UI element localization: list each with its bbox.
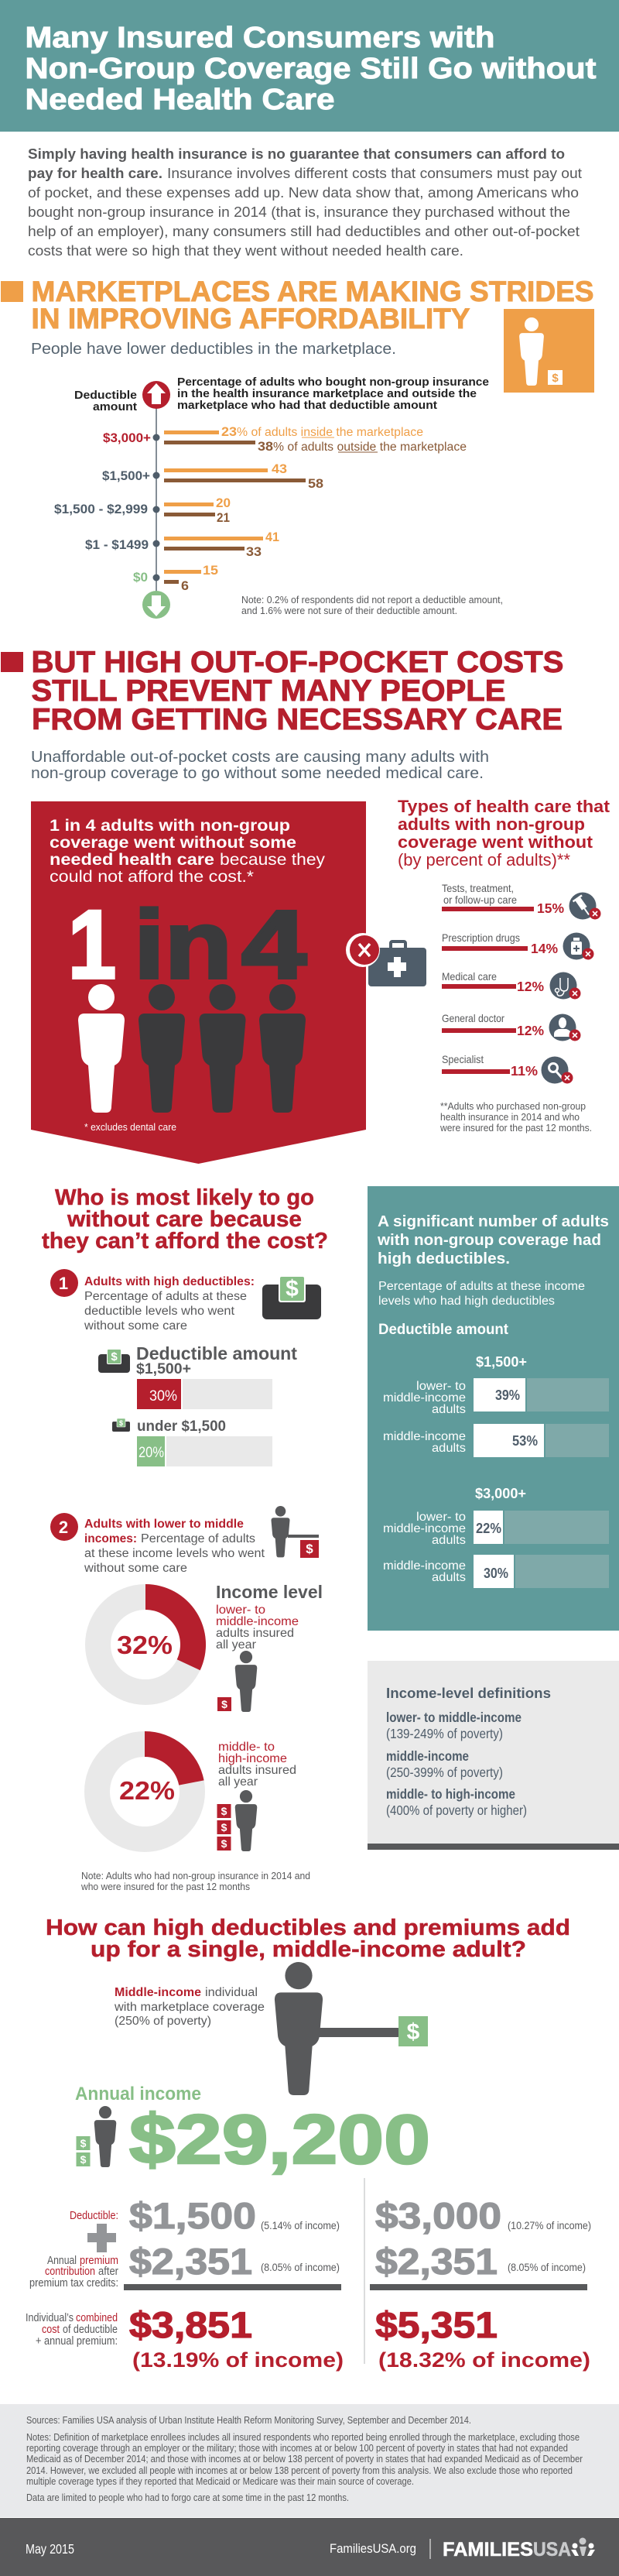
- chart description: marketplace who had that deductible amount: [177, 399, 437, 412]
- row: $3,000+: % of adults inside the marketplace: [237, 426, 423, 439]
- item 1: high deductibles: Percentage of adults at these: [84, 1290, 247, 1303]
- footnote: adults purchased: health insurance in 2014 and who: [440, 1112, 580, 1123]
- bar: middle 53 percent: adults: [432, 1442, 466, 1455]
- comparison labels: Deductible:: [70, 2209, 118, 2222]
- panel: income-level definitions: (139-249% of poverty): [386, 1726, 503, 1741]
- bar: lower to middle 22 percent: [383, 1511, 609, 1547]
- chart axis title: Deductible: [74, 389, 137, 402]
- icon: syringe: [569, 892, 600, 920]
- panel: income-level definitions: Income-level definitions: [386, 1685, 551, 1701]
- row: tests and treatment: [442, 882, 600, 920]
- panel: high deductibles by income: $3,000+: [475, 1486, 526, 1501]
- item 2: lower to middle incomes: [50, 1513, 265, 1575]
- text: middle-income individual: Middle-income: [115, 1986, 201, 1999]
- chart description: in the health insurance marketplace and outside the: [177, 387, 477, 400]
- heading: how can deductibles add up: How can high deductibles and premiums add: [46, 1916, 570, 1940]
- icon: pill bottle: [563, 932, 594, 960]
- comparison labels: [26, 2209, 118, 2348]
- footnote: adults purchased: were insured for the past 12 months.: [439, 1123, 592, 1134]
- section heading: marketplaces: [1, 276, 594, 334]
- bar: middle 30 percent: middle-income: [383, 1559, 466, 1573]
- row: $1,500 - $2,999: 21: [217, 511, 230, 525]
- bar: middle 53 percent: middle-income: [383, 1430, 466, 1443]
- panel description: levels who had high deductibles: [378, 1295, 555, 1308]
- bar: middle 30 percent: adults: [432, 1571, 466, 1584]
- column: $3,000 deductible scenario: $2,351: [375, 2241, 498, 2282]
- chart axis title: amount: [93, 400, 137, 413]
- heading: who is most likely: [42, 1185, 328, 1254]
- icon: orange box with person and dollar: [504, 309, 594, 393]
- big 1 in 4 numerals: [68, 891, 306, 999]
- bar: lower to middle 39 percent: lower- to: [416, 1380, 466, 1393]
- donut chart: 22 percent: 22%: [119, 1776, 175, 1805]
- subheading: unaffordable costs: non-group coverage to go without some needed medical care.: [31, 764, 484, 782]
- panel: high deductibles by income: $1,500+: [476, 1354, 527, 1370]
- comparison labels: Annual: [47, 2254, 77, 2267]
- donut chart: 32 percent: [97, 1584, 206, 1693]
- income level label: lower to middle: Income level: [216, 1582, 323, 1602]
- income level label: middle to high: middle- to: [218, 1741, 275, 1754]
- item 1: high deductibles: deductible levels who went: [84, 1305, 235, 1318]
- row: $0: 15: [203, 564, 218, 578]
- intro paragraph: [28, 146, 582, 259]
- panel statement: could not afford the cost.*: [50, 868, 254, 886]
- intro paragraph: Simply having health insurance is no guarantee that consumers can afford to: [28, 146, 565, 162]
- row: $3,000+: 23: [221, 425, 237, 439]
- big 1 in 4 numerals: in: [134, 891, 232, 999]
- icon: person with one dollar: [217, 1651, 257, 1712]
- intro paragraph: bought non-group insurance in 2014 (that is, insurance they purchased without the: [28, 204, 570, 220]
- row: specialist: 11%: [511, 1063, 538, 1079]
- deductible chart: [54, 376, 489, 619]
- row: general doctor: 12%: [517, 1023, 544, 1038]
- item 2: lower to middle incomes: without some care: [84, 1562, 187, 1575]
- bar: middle 53 percent: [383, 1424, 609, 1457]
- heading: types of care: (by percent of adults)**: [398, 850, 570, 870]
- row: medical care: [442, 970, 580, 999]
- row: $1,500+: [102, 462, 323, 491]
- income level label: lower to middle: [216, 1582, 323, 1652]
- row: prescription drugs: Prescription drugs: [442, 931, 520, 944]
- row: $1 - $1499: 41: [265, 530, 279, 544]
- icon: medical kit with x: [346, 933, 426, 986]
- row: $0: $0: [133, 571, 148, 585]
- panel: income-level definitions: lower- to middle-income: [386, 1710, 522, 1725]
- big 1 in 4 numerals: 1: [68, 891, 116, 999]
- intro paragraph: of pocket, and these expenses add up. New data show that, among Americans who: [28, 184, 579, 201]
- row: $1,500+: 58: [308, 477, 323, 491]
- icon: wallet with dollar: [262, 1275, 321, 1319]
- text: middle-income individual: with marketplace coverage: [114, 2001, 265, 2014]
- item 2: lower to middle incomes: Adults with lower to middle: [84, 1518, 244, 1531]
- column: $1,500 deductible scenario: $1,500: [129, 2195, 256, 2236]
- donut chart: 22 percent: [97, 1731, 204, 1840]
- row: $3,000+: [103, 425, 467, 454]
- row: tests and treatment: Tests, treatment,: [442, 882, 514, 894]
- panel: sources and notes: [0, 2404, 619, 2517]
- panel statement: 1 in 4 adults with non-group: [50, 817, 290, 835]
- bar: 30 percent: [137, 1379, 272, 1409]
- column: $3,000 deductible scenario: (10.27% of income): [508, 2220, 591, 2231]
- annual income label: Annual income: [75, 2084, 201, 2104]
- column: $3,000 deductible scenario: [370, 2195, 591, 2372]
- icon: stethoscope: [549, 972, 580, 999]
- section heading: high costs: [1, 646, 563, 736]
- subheading: unaffordable costs: Unaffordable out-of-pocket costs are causing many adults with: [31, 748, 489, 766]
- column: $1,500 deductible scenario: $3,851: [129, 2304, 252, 2345]
- icon: big person holding money: $: [407, 2019, 420, 2045]
- footer: May 2015: [26, 2541, 74, 2557]
- section heading: marketplaces: IN IMPROVING AFFORDABILITY: [31, 303, 470, 334]
- panel description: Percentage of adults at these income: [378, 1280, 585, 1293]
- panel: high deductibles by income: Deductible amount: [378, 1322, 509, 1338]
- bar: middle 30 percent: 30%: [484, 1566, 508, 1581]
- chart description: Percentage of adults who bought non-group insurance: [177, 376, 489, 389]
- icon: big person holding money: [275, 1962, 428, 2095]
- row: prescription drugs: 14%: [531, 941, 558, 956]
- heading: how can deductibles add up: [46, 1916, 570, 1962]
- icon: person holding dollar: [271, 1506, 319, 1558]
- section heading: high costs: STILL PREVENT MANY PEOPLE: [31, 674, 506, 708]
- icon: person with two dollars: $: [80, 2153, 87, 2166]
- note: non-group insurance: Note: Adults who had non-group insurance in 2014 and: [81, 1871, 310, 1881]
- column: $1,500 deductible scenario: (5.14% of income): [261, 2220, 340, 2231]
- icon: small wallet: $: [111, 1350, 118, 1363]
- income level label: middle to high: all year: [218, 1775, 258, 1789]
- panel: income-level definitions: [368, 1661, 619, 1850]
- panel: sources and notes: Data are limited to people who had to forgo care at some time in the past 12 months.: [26, 2492, 349, 2503]
- title banner: Non-Group Coverage Still Go without: [25, 53, 597, 85]
- icon: magnifier: [542, 1056, 573, 1084]
- donut chart: 32 percent: 32%: [117, 1631, 173, 1659]
- row: prescription drugs: [442, 931, 594, 960]
- heading: who is most likely: Who is most likely to go: [55, 1185, 314, 1210]
- bar: lower to middle 39 percent: middle-income: [383, 1391, 466, 1405]
- row: tests and treatment: 15%: [537, 900, 564, 916]
- row: $1 - $1499: 33: [246, 545, 262, 559]
- icon: person with two dollars: $: [80, 2137, 87, 2149]
- icon: plus sign: [87, 2224, 116, 2252]
- item 2: lower to middle incomes: at these income levels who went: [84, 1547, 265, 1560]
- deductible amount bars: under $1,500: [137, 1418, 226, 1435]
- logo: Families USA: USA: [533, 2539, 571, 2561]
- comparison labels: + annual premium:: [36, 2334, 118, 2348]
- chart axis: [142, 381, 170, 619]
- row: $3,000+: 38: [258, 440, 273, 454]
- row: tests and treatment: or follow-up care: [443, 894, 517, 906]
- intro paragraph: costs that were so high that they went without needed health care.: [28, 242, 463, 259]
- text: middle-income individual: individual: [205, 1986, 258, 1999]
- icon: person with three dollars: $: [221, 1837, 227, 1850]
- title banner: [0, 0, 619, 132]
- panel: income-level definitions: middle- to high-income: [386, 1786, 515, 1802]
- bar: 20 percent: [137, 1436, 272, 1466]
- footer: [0, 2518, 619, 2576]
- row: specialist: Specialist: [442, 1053, 484, 1065]
- intro paragraph: Insurance involves different costs that consumers must pay out: [167, 165, 582, 181]
- column: $1,500 deductible scenario: (8.05% of income): [261, 2262, 340, 2273]
- income level label: lower to middle: adults insured: [216, 1627, 294, 1640]
- item 1: high deductibles: [50, 1269, 255, 1333]
- heading: who is most likely: they can’t afford the cost?: [42, 1229, 328, 1254]
- intro paragraph: help of an employer), many consumers still had deductibles and other out-of-pocket: [28, 223, 580, 239]
- comparison labels: Individual’s: [26, 2311, 74, 2324]
- intro paragraph: pay for health care.: [28, 165, 162, 181]
- row: $1 - $1499: $1 - $1499: [85, 538, 149, 552]
- item 2: lower to middle incomes: 2: [59, 1518, 68, 1537]
- row: $1,500+: $1,500+: [102, 469, 150, 483]
- icon: person with two dollars: [76, 2106, 116, 2167]
- panel: income-level definitions: (400% of poverty or higher): [386, 1803, 527, 1818]
- column: $3,000 deductible scenario: (8.05% of income): [508, 2262, 586, 2273]
- annual income amount: $29,200: [129, 2101, 430, 2179]
- panel: sources and notes: Sources: Families USA analysis of Urban Institute Health Reform Monitoring Survey, September and December 2014.: [26, 2414, 471, 2426]
- panel statement: coverage went without some: [50, 834, 296, 852]
- icon: tiny wallet: $: [119, 1419, 123, 1427]
- four people pictogram: [78, 984, 306, 1113]
- deductible amount bars: $1,500+: [136, 1361, 191, 1377]
- row: medical care: 12%: [517, 979, 544, 994]
- comparison labels: combined: [76, 2311, 118, 2324]
- deductible amount bars: [98, 1343, 297, 1466]
- row: $1,500 - $2,999: 20: [216, 496, 231, 510]
- panel description: [378, 1280, 585, 1308]
- row: specialist: [442, 1053, 573, 1084]
- heading: types of care: Types of health care that: [398, 797, 610, 816]
- row: general doctor: General doctor: [442, 1012, 504, 1024]
- footer: FamiliesUSA.org: [330, 2541, 416, 2556]
- heading: types of care: [398, 797, 610, 870]
- icon: small wallet: [98, 1349, 130, 1373]
- panel statement: [50, 817, 326, 886]
- bar: lower to middle 22 percent: lower- to: [416, 1511, 466, 1524]
- heading: who is most likely: without care because: [67, 1207, 302, 1232]
- footnote: excludes dental: * excludes dental care: [84, 1121, 176, 1133]
- panel heading: high deductibles.: [378, 1250, 510, 1267]
- logo: Families USA: FAMILIES: [443, 2539, 533, 2561]
- column: $1,500 deductible scenario: (13.19% of income): [132, 2348, 344, 2372]
- bar: lower to middle 39 percent: 39%: [495, 1387, 520, 1403]
- title banner: Needed Health Care: [25, 84, 334, 116]
- bar: 20 percent: 20%: [139, 1445, 164, 1461]
- row: $1,500 - $2,999: $1,500 - $2,999: [54, 503, 148, 516]
- footnote: adults purchased: **Adults who purchased non-group: [440, 1101, 586, 1112]
- logo: Families USA: [443, 2538, 595, 2561]
- text: middle-income individual: [114, 1986, 265, 2028]
- panel statement: because they: [220, 851, 326, 869]
- text: middle-income individual: (250% of poverty): [115, 2015, 211, 2028]
- chart axis title: [74, 389, 137, 413]
- column: $3,000 deductible scenario: $3,000: [375, 2195, 501, 2236]
- section heading: high costs: BUT HIGH OUT-OF-POCKET COSTS: [31, 646, 563, 679]
- item 2: lower to middle incomes: incomes:: [84, 1532, 137, 1545]
- panel: high deductibles by income: [368, 1186, 619, 1631]
- title banner: Many Insured Consumers with: [25, 22, 495, 54]
- icon: person with three dollars: $: [221, 1805, 227, 1817]
- panel: 1 in 4: [31, 801, 366, 1164]
- row: $1 - $1499: [85, 530, 279, 559]
- column: $1,500 deductible scenario: [124, 2195, 344, 2372]
- row: $1,500+: 43: [272, 462, 287, 476]
- icon: tiny wallet: [112, 1418, 130, 1432]
- section heading: high costs: FROM GETTING NECESSARY CARE: [32, 703, 563, 736]
- income level label: middle to high: high-income: [218, 1752, 287, 1765]
- income level label: middle to high: [218, 1741, 296, 1789]
- icon: person with three dollars: $: [221, 1821, 227, 1833]
- comparison labels: cost: [42, 2323, 60, 2336]
- big 1 in 4 numerals: 4: [241, 891, 306, 999]
- row: $3,000+: $3,000+: [103, 431, 151, 445]
- bar: middle 30 percent: [383, 1555, 609, 1588]
- bar: middle 53 percent: 53%: [512, 1433, 538, 1449]
- chart note: and 1.6% were not sure of their deductible amount.: [241, 605, 457, 616]
- panel heading: [377, 1213, 609, 1267]
- bar: lower to middle 39 percent: [383, 1378, 609, 1416]
- heading: types of care: coverage went without: [398, 832, 593, 852]
- column: $1,500 deductible scenario: $2,351: [129, 2241, 252, 2282]
- chart note: Note: 0.2% of respondents did not report a deductible amount,: [241, 595, 503, 605]
- chart note: [241, 595, 503, 616]
- bar: 30 percent: 30%: [149, 1388, 177, 1405]
- row: medical care: Medical care: [442, 970, 497, 983]
- bar: lower to middle 22 percent: middle-income: [383, 1522, 466, 1535]
- item 1: high deductibles: 1: [59, 1274, 68, 1293]
- panel heading: A significant number of adults: [378, 1213, 609, 1230]
- comparison labels: of deductible: [63, 2323, 118, 2336]
- panel statement: needed health care: [50, 851, 214, 869]
- comparison labels: after: [98, 2265, 118, 2278]
- panel: income-level definitions: middle-income: [386, 1748, 469, 1764]
- panel: income-level definitions: (250-399% of poverty): [386, 1765, 503, 1780]
- heading: how can deductibles add up: up for a single, middle-income adult?: [91, 1937, 526, 1962]
- bar: lower to middle 39 percent: adults: [432, 1403, 466, 1416]
- icon: person with three dollars: [217, 1790, 257, 1851]
- row: $3,000+: % of adults outside the marketplace: [273, 441, 467, 454]
- comparison labels: premium tax credits:: [29, 2276, 118, 2290]
- comparison labels: premium: [80, 2254, 118, 2267]
- section heading: marketplaces: MARKETPLACES ARE MAKING STRIDES: [31, 276, 594, 307]
- icon: person with one dollar: $: [221, 1698, 227, 1710]
- subheading: unaffordable costs: [31, 748, 489, 782]
- chart description: [177, 376, 489, 412]
- income level label: lower to middle: middle-income: [216, 1615, 299, 1628]
- income level label: lower to middle: all year: [216, 1638, 257, 1652]
- bar: lower to middle 22 percent: adults: [432, 1534, 466, 1547]
- item 1: high deductibles: without some care: [84, 1319, 187, 1333]
- panel: sources and notes: multiple coverage types if they reported that Medicaid or Medicare was their main source of coverage.: [26, 2475, 414, 2487]
- row: $0: 6: [181, 579, 189, 593]
- subheading: lower deductibles: People have lower deductibles in the marketplace.: [31, 340, 396, 358]
- icon: orange box with person and dollar: $: [552, 372, 559, 385]
- heading: types of care: adults with non-group: [398, 815, 585, 834]
- icon: wallet with dollar: $: [286, 1276, 299, 1302]
- item 2: lower to middle incomes: Percentage of adults: [141, 1532, 255, 1545]
- icon: person holding dollar: $: [306, 1542, 313, 1556]
- row: general doctor: [442, 1012, 580, 1041]
- income level label: lower to middle: lower- to: [216, 1604, 265, 1617]
- note: non-group insurance: [80, 1871, 310, 1892]
- row: $0: [133, 564, 218, 593]
- note: non-group insurance: who were insured for the past 12 months: [80, 1881, 250, 1892]
- item 1: high deductibles: Adults with high deductibles:: [84, 1275, 255, 1288]
- icon: doctor: [549, 1014, 580, 1041]
- column: $3,000 deductible scenario: $5,351: [375, 2304, 498, 2345]
- deductible amount bars: Deductible amount: [136, 1343, 297, 1363]
- row: $1,500 - $2,999: [54, 496, 231, 525]
- column: $3,000 deductible scenario: (18.32% of income): [378, 2348, 590, 2372]
- comparison labels: contribution: [45, 2265, 95, 2278]
- footnote: adults purchased: [439, 1101, 592, 1134]
- panel heading: with non-group coverage had: [377, 1231, 601, 1249]
- income level label: middle to high: adults insured: [218, 1764, 296, 1777]
- bar: lower to middle 22 percent: 22%: [476, 1521, 501, 1536]
